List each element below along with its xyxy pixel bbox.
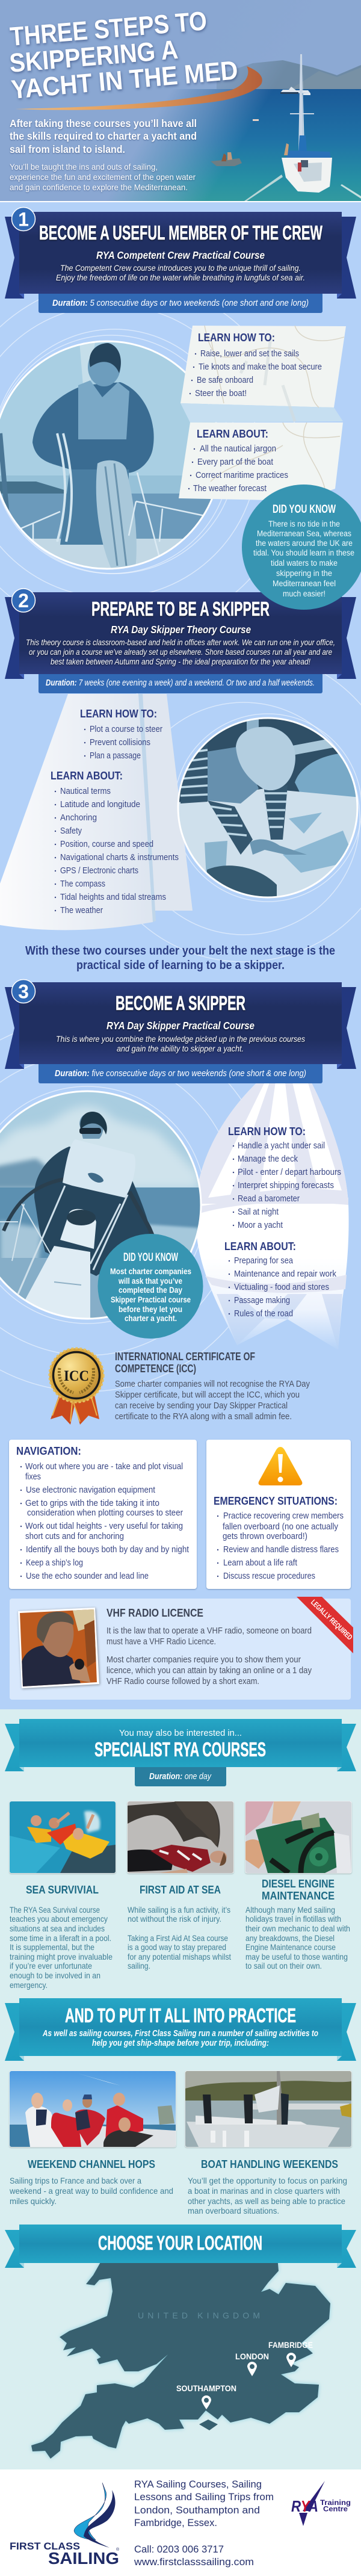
title: THREE STEPS TO (9, 6, 208, 52)
learn about list (224, 1240, 337, 1319)
practice banner (5, 1998, 356, 2061)
footer text: Lessons and Sailing Trips from (134, 2491, 274, 2503)
photo: crew on deck (10, 2070, 176, 2147)
hero intro text: experience the fun and excitement of the open water (10, 172, 196, 182)
learn about list: GPS / Electronic charts (60, 866, 138, 876)
step 2 description (26, 637, 335, 666)
learn how to list: Tie knots and make the boat secure (199, 362, 322, 372)
step 1 course name: RYA Competent Crew Practical Course (96, 249, 265, 261)
RYA Training Centre logo: RYA (291, 2497, 318, 2515)
step 3 description (56, 1034, 305, 1053)
did you know 1: much easier! (283, 589, 326, 598)
title: SKIPPERING A (8, 35, 179, 78)
emergency card: Review and handle distress flares (223, 1545, 339, 1555)
pin: London (235, 2352, 269, 2376)
UK map (31, 2257, 330, 2459)
learn about list: Every part of the boat (197, 457, 273, 467)
learn how to list: Sail at night (238, 1207, 279, 1217)
learn about list: Victualing - food and stores (234, 1283, 329, 1292)
learn how to list: Read a barometer (238, 1194, 300, 1204)
step 1 photo: crew member with rope (0, 341, 217, 569)
hero intro text: You’ll be taught the ins and outs of sailing, (10, 162, 158, 172)
learn how to list: Raise, lower and set the sails (200, 349, 299, 359)
learn how to list (80, 708, 162, 761)
photo: yacht in marina (185, 2070, 351, 2147)
ICC text block: certificate to the RYA along with a small admin fee. (115, 1412, 292, 1422)
step 1 description: The Competent Crew course introduces you to the unique thrill of sailing. (60, 263, 301, 273)
body: Although many Med sailing (245, 1905, 335, 1915)
body: not without the risk of injury. (128, 1914, 221, 1924)
learn how to list: Be safe onboard (197, 376, 253, 385)
duration bar (39, 674, 322, 693)
body (9, 2176, 173, 2206)
learn how to list: Prevent collisions (90, 738, 150, 748)
specialist courses banner (5, 1719, 356, 1786)
navigation card: Use electronic navigation equipment (26, 1485, 155, 1495)
photo: sea survival (10, 1801, 116, 1873)
footer text: www.firstclasssailing.com (134, 2556, 254, 2568)
body: enough to be involved in an (10, 1971, 100, 1980)
emergency card: gets thrown overboard!) (223, 1532, 307, 1541)
heading: SEA SURVIVIAL (26, 1884, 99, 1896)
page background: blue section (0, 201, 361, 1709)
did you know 1: the waters around the UK are (256, 539, 353, 548)
body: It is supplemental, but the (10, 1942, 94, 1952)
did you know 1: tidal. You should learn in these (253, 548, 354, 557)
body: man overboard situations. (188, 2206, 279, 2215)
heading: DIESEL ENGINE (262, 1878, 335, 1890)
step 3 heading: BECOME A SKIPPER (116, 992, 245, 1014)
step 1 description (56, 263, 305, 282)
body: situations at sea and includes (10, 1924, 105, 1933)
body: a boat in marinas and in close quarters with (188, 2186, 340, 2196)
duration bar: Duration: 5 consecutive days or two weekends (one short and one long) (52, 299, 309, 308)
First Class Sailing logo: SAILING (48, 2549, 119, 2568)
duration tab (135, 1767, 226, 1786)
number badge 3 (12, 980, 35, 1003)
weekend channel hops (9, 2070, 176, 2206)
navigation card (9, 1440, 197, 1589)
transition statement: With these two courses under your belt the next stage is the (25, 944, 335, 958)
footer text: London, Southampton and (134, 2504, 260, 2516)
step 3 photo: woman at the helm (0, 1091, 201, 1324)
step 2 description: best taken between Autumn and Spring - the ideal preparation for the year ahead! (51, 657, 310, 666)
body: is a good way to stay prepared (128, 1942, 226, 1952)
number badge 2 (12, 589, 35, 612)
learn about list: Correct maritime practices (196, 471, 288, 480)
learn about list: The weather forecast (193, 484, 267, 494)
heading (262, 1878, 335, 1902)
emergency card: Discuss rescue procedures (223, 1571, 315, 1581)
learn about list: Latitude and longitude (60, 800, 140, 810)
body: miles quickly. (10, 2196, 57, 2206)
First Class Sailing logo (10, 2483, 120, 2568)
navigation card: Use the echo sounder and lead line (26, 1571, 149, 1581)
body: teaches you about emergency (10, 1914, 108, 1924)
learn how to list: LEARN HOW TO: (228, 1125, 306, 1138)
VHF radio licence panel: VHF RADIO LICENCE (106, 1607, 203, 1619)
learn about list: Position, course and speed (60, 840, 153, 849)
navigation card: Get to grips with the tide taking it into (25, 1499, 159, 1508)
VHF radio licence panel: VHF Radio course followed by a short exam. (106, 1677, 259, 1686)
diesel engine course (245, 1801, 351, 1971)
body: holidays travel in flotillas with (245, 1914, 341, 1924)
did you know 2: charter a yacht. (125, 1314, 177, 1323)
ICC text block: COMPETENCE (ICC) (115, 1363, 196, 1375)
body: training might prove invaluable (10, 1952, 113, 1961)
sea survival course (10, 1801, 116, 1990)
country label: UNITED KINGDOM (138, 2311, 260, 2320)
heading: WEEKEND CHANNEL HOPS (28, 2158, 155, 2170)
heading: CHOOSE YOUR LOCATION (98, 2232, 262, 2254)
heading: SPECIALIST RYA COURSES (94, 1738, 266, 1760)
navigation card: short cuts and for anchoring (25, 1532, 124, 1541)
body: weekend - a great way to build confidence and (9, 2186, 173, 2196)
RYA Training Centre logo (291, 2481, 351, 2526)
did you know 1: DID YOU KNOW (273, 503, 336, 516)
subheading: help you get ship-shape before your trip, including: (92, 2039, 269, 2048)
page background: footer (0, 2469, 361, 2576)
hero panel (0, 0, 361, 201)
did you know 1: Mediterranean feel (273, 579, 336, 588)
did you know 2: completed the Day (119, 1286, 182, 1295)
heading: BOAT HANDLING WEEKENDS (201, 2158, 338, 2170)
body: for any potential mishaps whilst (128, 1952, 231, 1961)
learn how to list: Interpret shipping forecasts (238, 1181, 334, 1190)
duration bar (39, 294, 322, 313)
VHF radio licence panel: licence, which you can attain by taking an online or a 1 day (106, 1666, 312, 1676)
hero intro text: the skills required to charter a yacht and (10, 130, 197, 142)
pin: Fambridge: FAMBRIDGE (268, 2340, 313, 2350)
number badge 1: 1 (18, 208, 29, 230)
did you know 2: before they let you (119, 1305, 182, 1314)
emergency card (206, 1440, 351, 1589)
orange swoosh (15, 66, 262, 110)
body: other yachts, as well as being able to practice (188, 2196, 345, 2206)
heading: MAINTENANCE (262, 1890, 335, 1902)
learn how to list: Moor a yacht (238, 1221, 283, 1230)
step 2 course name: RYA Day Skipper Theory Course (111, 624, 251, 636)
body: may be useful to those wanting (245, 1952, 348, 1961)
navigation card: NAVIGATION: (16, 1445, 81, 1457)
ICC medal icon (49, 1348, 103, 1425)
intro line: You may also be interested in... (119, 1728, 242, 1738)
ICC text block (115, 1351, 310, 1422)
body: While sailing is a fun activity, it’s (128, 1905, 230, 1915)
body: if you’re ever unfortunate (10, 1961, 92, 1971)
footer text: RYA Sailing Courses, Sailing (134, 2478, 262, 2490)
first aid course (128, 1801, 233, 1971)
learn about list: Passage making (234, 1296, 290, 1305)
transition statement (25, 944, 335, 972)
RYA Training Centre logo: Training (320, 2500, 351, 2507)
navigation card: Keep a ship’s log (26, 1558, 83, 1568)
learn about list: Navigational charts & instruments (60, 853, 179, 862)
body (128, 1905, 231, 1971)
page background: teal section (0, 1709, 361, 2469)
learn about list: Nautical terms (60, 787, 111, 796)
learn how to list: LEARN HOW TO: (198, 332, 275, 344)
learn about list: Anchoring (60, 813, 97, 823)
learn about list: LEARN ABOUT: (224, 1240, 296, 1252)
step 3 spinnaker panel (196, 1077, 349, 1350)
duration bar: Duration: five consecutive days or two weekends (one short & one long) (55, 1069, 306, 1079)
step 3 description: This is where you combine the knowledge picked up in the previous courses (56, 1034, 305, 1044)
icon: warning triangle (259, 1447, 302, 1485)
navigation card: Work out tidal heights - very useful for taking (25, 1522, 183, 1531)
navigation card: fixes (25, 1472, 41, 1482)
did you know 2: Skipper Practical course (111, 1295, 191, 1304)
body (10, 1905, 113, 1990)
legally required ribbon (297, 1597, 354, 1653)
pin: Fambridge (268, 2340, 313, 2367)
body: Engine Maintenance course (245, 1942, 336, 1952)
title (8, 6, 239, 105)
learn how to list: Plan a passage (90, 751, 141, 761)
body (245, 1905, 350, 1971)
did you know 1: Mediterranean Sea, whereas (257, 529, 351, 538)
hero intro text: sail from island to island. (10, 143, 125, 155)
emergency card: Practice recovering crew members (223, 1511, 344, 1521)
First Class Sailing logo: ® (116, 2547, 120, 2552)
learn about list (51, 770, 179, 915)
location banner (5, 2225, 356, 2268)
body: Sailing trips to France and back over a (10, 2176, 141, 2185)
pin: Southampton (176, 2383, 236, 2409)
duration bar (39, 1064, 322, 1083)
navigation card: consideration when plotting courses to steer (27, 1508, 183, 1518)
learn about list (188, 428, 288, 494)
step 2 paper panel (0, 694, 193, 930)
step 2 photo: woman plotting on a chart (174, 716, 361, 903)
learn about list: The compass (60, 879, 105, 889)
body: some time in a liferaft in a pool. (10, 1933, 111, 1943)
footer text (134, 2478, 274, 2568)
RYA Training Centre logo: Centre (323, 2506, 348, 2513)
learn about list: Maintenance and repair work (234, 1269, 337, 1279)
ICC medal icon: ICC (64, 1368, 89, 1384)
hero photo: yacht at anchor (0, 0, 361, 201)
step 1 description: Enjoy the freedom of life on the water while breathing in lungfuls of sea air. (56, 273, 305, 282)
boat handling weekends (185, 2070, 351, 2215)
learn how to list: Manage the deck (238, 1154, 298, 1164)
body: to sail out on their own. (245, 1961, 322, 1971)
ICC text block: Some charter companies will not recognise the RYA Day (115, 1379, 310, 1389)
heading: FIRST AID AT SEA (140, 1884, 221, 1896)
body: emergency. (10, 1980, 48, 1990)
number badge 1 (12, 207, 35, 231)
learn about list: Tidal heights and tidal streams (60, 893, 166, 902)
body: Taking a First Aid At Sea course (128, 1933, 228, 1943)
body: You’ll get the opportunity to focus on parking (188, 2176, 347, 2185)
First Class Sailing logo: FIRST CLASS (10, 2540, 80, 2552)
learn about list: All the nautical jargon (200, 444, 276, 454)
learn how to list: LEARN HOW TO: (80, 708, 157, 720)
body: their own mechanic to deal with (245, 1924, 350, 1933)
transition statement: practical side of learning to be a skipper. (76, 959, 285, 972)
learn about list: Rules of the road (234, 1309, 293, 1319)
hero intro text (10, 117, 197, 192)
did you know 2: Most charter companies (110, 1267, 191, 1276)
did you know 1: tidal waters to make (271, 559, 338, 568)
learn how to list (190, 332, 322, 398)
learn about list: Preparing for sea (234, 1256, 294, 1266)
ICC text block: INTERNATIONAL CERTIFICATE OF (115, 1351, 255, 1363)
learn how to list: Handle a yacht under sail (238, 1141, 325, 1151)
hero divider (0, 201, 361, 202)
did you know 1: There is no tide in the (268, 519, 340, 528)
VHF radio licence panel: Most charter companies require you to show them your (106, 1655, 301, 1665)
learn how to list: Pilot - enter / depart harbours (238, 1168, 341, 1177)
hero intro text: and gain confidence to explore the Mediterranean. (10, 182, 188, 192)
hero intro text: After taking these courses you’ll have all (10, 117, 197, 129)
step 1 banner (5, 207, 356, 313)
did you know 2: will ask that you’ve (118, 1277, 182, 1286)
decorative arcs (0, 280, 361, 1392)
subheading (42, 2029, 318, 2048)
step 2 banner (5, 589, 356, 693)
did you know 2 (97, 1234, 203, 1339)
footer text: Fambridge, Essex. (134, 2517, 217, 2528)
VHF radio licence panel: It is the law that to operate a VHF radio, someone on board (106, 1626, 312, 1636)
step 3 course name: RYA Day Skipper Practical Course (106, 1020, 255, 1032)
learn how to list (228, 1125, 341, 1230)
ICC text block: Skipper certificate, but will accept the ICC, which you (115, 1390, 300, 1400)
footer text: Call: 0203 006 3717 (134, 2543, 224, 2555)
photo: first aid at sea (128, 1801, 233, 1873)
VHF radio licence panel: must have a VHF Radio Licence. (106, 1637, 216, 1647)
body: any breakdowns, the Diesel (245, 1933, 335, 1943)
learn about list: Safety (60, 826, 82, 836)
step 3 description: and gain the ability to skipper a yacht. (117, 1044, 244, 1053)
body: The RYA Sea Survival course (10, 1905, 100, 1915)
emergency card: fallen overboard (no one actually (223, 1522, 339, 1532)
photo: diesel engine (245, 1801, 351, 1873)
step 3 banner (5, 980, 356, 1083)
ICC text block: can receive by sending your Day Skipper Practical (115, 1401, 288, 1411)
pin: Southampton: SOUTHAMPTON (176, 2383, 236, 2393)
navigation card: Identify all the bouys both by day and by night (26, 1545, 189, 1555)
did you know 2: DID YOU KNOW (123, 1251, 178, 1264)
duration tab: Duration: one day (149, 1772, 212, 1782)
VHF radio licence panel (10, 1597, 354, 1700)
learn about list: LEARN ABOUT: (197, 428, 268, 440)
learn how to list: Plot a course to steer (90, 725, 162, 734)
did you know 1 (242, 485, 361, 610)
number badge 2: 2 (18, 590, 29, 611)
step 1 paper panel (179, 326, 346, 501)
body: sailing. (128, 1961, 150, 1971)
emergency card: EMERGENCY SITUATIONS: (214, 1495, 338, 1507)
navigation card: Work out where you are - take and plot visual (25, 1462, 183, 1472)
did you know 1: skippering in the (276, 569, 332, 578)
map shape: southern UK (31, 2257, 330, 2459)
number badge 3: 3 (18, 981, 29, 1003)
emergency card: Learn about a life raft (223, 1558, 297, 1568)
title: YACHT IN THE MED (10, 55, 239, 105)
learn about list: The weather (60, 906, 103, 915)
learn how to list: Steer the boat! (195, 389, 247, 398)
pin: London: LONDON (235, 2352, 269, 2361)
body (188, 2176, 347, 2215)
VHF photo: man using radio (18, 1607, 99, 1688)
step 2 heading: PREPARE TO BE A SKIPPER (91, 598, 270, 620)
learn about list: LEARN ABOUT: (51, 770, 123, 782)
